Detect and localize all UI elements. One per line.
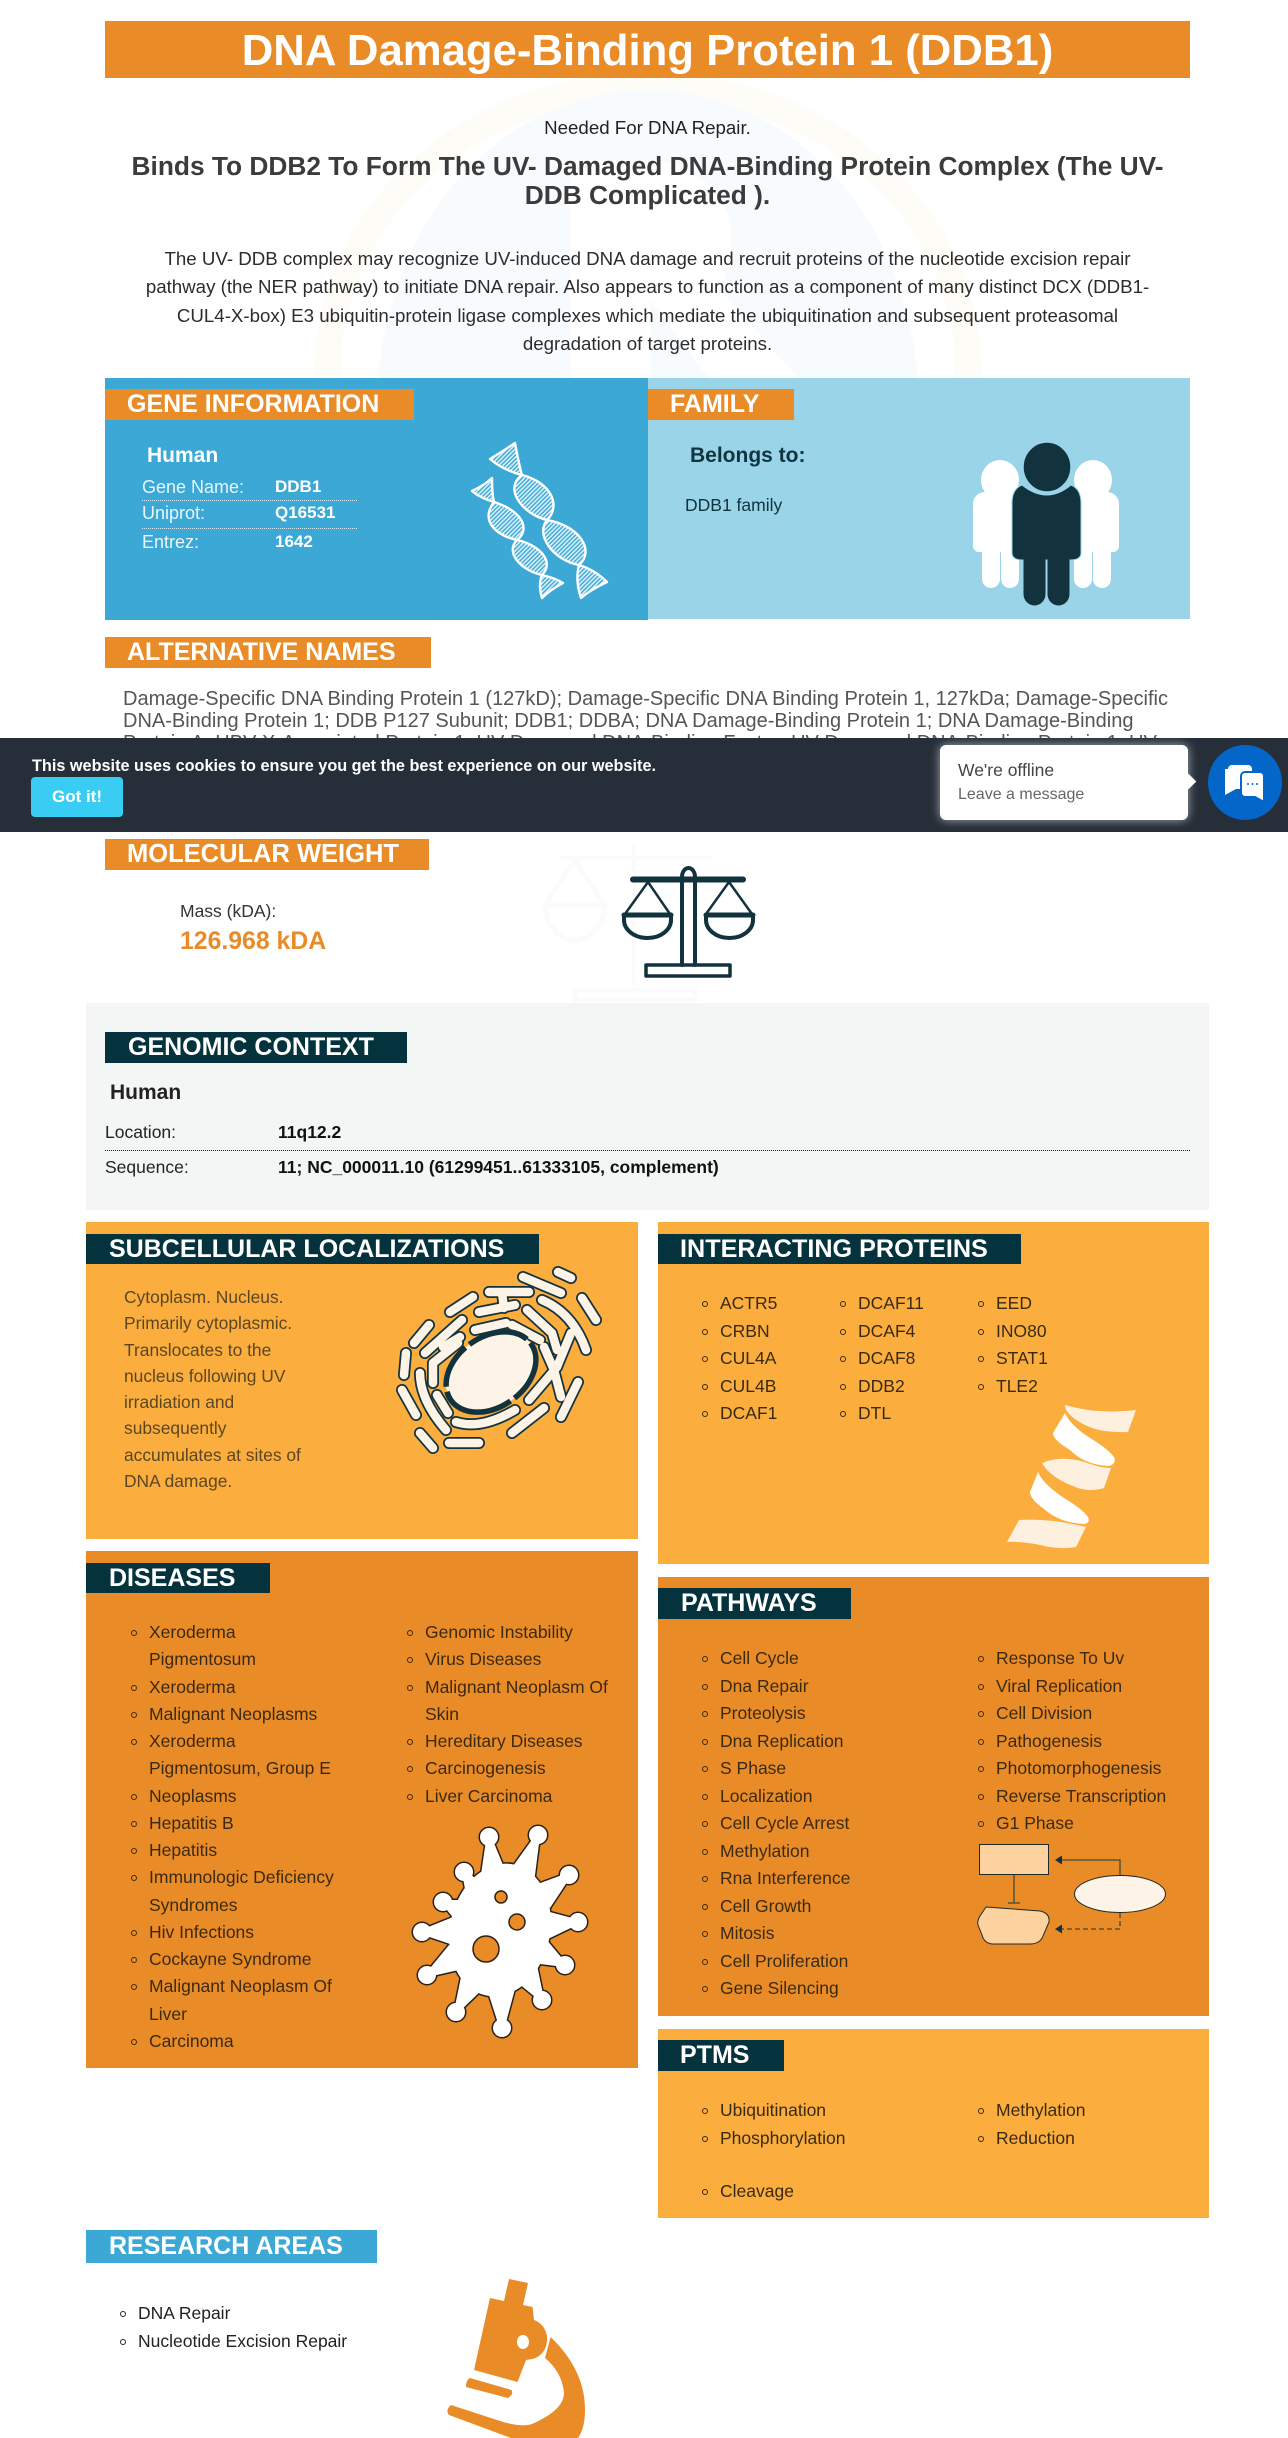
pathways list, second column: Response To Uv	[996, 1648, 1124, 1668]
function heading: DDB Complicated ).	[525, 180, 770, 210]
heading: genomic context: GENOMIC CONTEXT	[128, 1033, 374, 1061]
location row: Location:	[105, 1122, 176, 1142]
pathways list, second column: Viral Replication	[996, 1676, 1122, 1696]
PTMs list, second column: Methylation	[996, 2100, 1086, 2120]
proteins list, second column: DTL	[858, 1403, 891, 1423]
PTMs list, first column: Ubiquitination	[720, 2100, 826, 2120]
cookie message: This website uses cookies to ensure you get the best experience on our website.	[32, 757, 656, 775]
heading: diseases	[86, 1563, 270, 1593]
proteins list, first column: CRBN	[720, 1320, 770, 1340]
pathways list, second column	[978, 1648, 1166, 1833]
title banner	[105, 21, 1190, 78]
heading: pathways	[658, 1588, 851, 1619]
proteins list, second column	[840, 1293, 924, 1423]
gene info table: DDB1	[275, 477, 321, 496]
pathways list, first column: Dna Repair	[720, 1676, 809, 1696]
alternative names text: Damage-Specific DNA Binding Protein 1 (127kD); Damage-Specific DNA Binding Protein 1, 127kDa; Damage-Specific	[123, 688, 1168, 710]
localization description: accumulates at sites of	[124, 1445, 301, 1465]
chat offline bubble: Leave a message	[958, 786, 1084, 803]
heading: gene information: GENE INFORMATION	[127, 390, 379, 418]
diseases list, first column	[131, 1622, 334, 2051]
location row: 11q12.2	[278, 1122, 341, 1142]
proteins list, first column: DCAF1	[720, 1403, 777, 1423]
gene info table: Gene Name:	[142, 477, 244, 497]
description paragraph: CUL4-X-box) E3 ubiquitin-protein ligase complexes which mediate the ubiquitination and subsequent proteasomal	[177, 305, 1118, 326]
heading: family: FAMILY	[670, 390, 759, 418]
diseases list, second column: Carcinogenesis	[425, 1758, 546, 1778]
species label: Human	[147, 444, 218, 467]
panel: genomic context	[86, 1003, 1209, 1210]
pathways list, first column: Proteolysis	[720, 1703, 806, 1723]
diseases list, second column: Malignant Neoplasm Of	[425, 1676, 608, 1696]
heading: pathways: PATHWAYS	[681, 1589, 817, 1617]
diseases list, first column: Liver	[149, 2004, 187, 2024]
pathways list, first column: S Phase	[720, 1758, 786, 1778]
diseases list, first column: Syndromes	[149, 1894, 238, 1914]
diseases list, second column	[407, 1622, 608, 1806]
panel: gene information	[105, 378, 648, 620]
diseases list, first column: Carcinoma	[149, 2031, 234, 2051]
diseases list, second column: Virus Diseases	[425, 1649, 541, 1669]
proteins list, third column: EED	[996, 1293, 1032, 1313]
location row	[105, 1122, 341, 1142]
panel: family	[648, 378, 1190, 619]
species label: Human	[110, 1081, 181, 1104]
proteins list, second column: DDB2	[858, 1376, 905, 1396]
diseases list, first column: Pigmentosum, Group E	[149, 1758, 331, 1778]
icon: chat button	[1208, 745, 1282, 820]
proteins list, second column: DCAF4	[858, 1320, 915, 1340]
icon: group of people	[973, 442, 1119, 606]
localization description: subsequently	[124, 1418, 226, 1438]
proteins list, third column: INO80	[996, 1320, 1047, 1340]
function heading	[132, 150, 1163, 210]
pathways list, second column: Pathogenesis	[996, 1730, 1102, 1750]
pathways list, first column: Cell Proliferation	[720, 1950, 848, 1970]
diseases list, first column: Xeroderma	[149, 1676, 236, 1696]
gene info table: 1642	[275, 532, 313, 551]
diseases list, first column: Xeroderma	[149, 1622, 236, 1642]
mass label: Mass (kDA):	[180, 901, 276, 921]
diseases list, second column: Skin	[425, 1704, 459, 1724]
localization description: DNA damage.	[124, 1471, 232, 1491]
diseases list, first column: Pigmentosum	[149, 1649, 256, 1669]
gene info table: Uniprot:	[142, 503, 205, 523]
icon: microscope	[447, 2279, 585, 2438]
heading: research areas	[86, 2230, 377, 2263]
panel: PTMs	[658, 2029, 1209, 2218]
diseases list, second column: Liver Carcinoma	[425, 1786, 552, 1806]
diseases list, first column: Hepatitis B	[149, 1813, 234, 1833]
alternative names text: DNA-Binding Protein 1; DDB P127 Subunit; DDB1; DDBA; DNA Damage-Binding Protein 1; DNA Damage-Binding	[123, 710, 1134, 732]
pathways list, second column: Cell Division	[996, 1703, 1092, 1723]
icon: protein ribbon helix	[1007, 1405, 1136, 1548]
pathways list, second column: Photomorphogenesis	[996, 1758, 1161, 1778]
research areas list	[120, 2303, 347, 2350]
localization description: nucleus following UV	[124, 1366, 285, 1386]
title banner: DNA Damage-Binding Protein 1 (DDB1)	[242, 26, 1053, 75]
localization description	[124, 1287, 301, 1491]
pathways list, first column: Cell Cycle Arrest	[720, 1813, 849, 1833]
research areas list: Nucleotide Excision Repair	[138, 2330, 347, 2350]
localization description: Translocates to the	[124, 1340, 271, 1360]
heading: subcellular localizations: SUBCELLULAR LOCALIZATIONS	[109, 1235, 504, 1263]
panel: interacting proteins	[658, 1222, 1209, 1564]
pathways list, second column: G1 Phase	[996, 1813, 1074, 1833]
proteins list, third column: STAT1	[996, 1348, 1048, 1368]
background watermark logo	[315, 78, 981, 378]
mass value: 126.968 kDA	[180, 928, 326, 955]
pathways list, first column: Gene Silencing	[720, 1978, 839, 1998]
localization description: Primarily cytoplasmic.	[124, 1313, 292, 1333]
diseases list, first column: Malignant Neoplasm Of	[149, 1976, 332, 1996]
heading: research areas: RESEARCH AREAS	[109, 2232, 343, 2260]
chat offline bubble	[940, 745, 1188, 820]
heading: interacting proteins: INTERACTING PROTEINS	[680, 1235, 988, 1263]
icon: pathway diagram	[977, 1844, 1166, 1944]
button: got it	[31, 777, 123, 817]
icon: DNA double helix	[470, 442, 608, 600]
diseases list, second column: Hereditary Diseases	[425, 1731, 583, 1751]
belongs to label: Belongs to:	[690, 444, 806, 467]
pathways list, first column: Dna Replication	[720, 1730, 844, 1750]
cookie consent banner	[0, 738, 1288, 832]
PTMs list, first column: Cleavage	[720, 2180, 794, 2200]
family name: DDB1 family	[685, 495, 782, 515]
icon: virus	[412, 1824, 588, 2038]
panel: diseases	[86, 1551, 638, 2068]
diseases list, first column: Neoplasms	[149, 1786, 237, 1806]
proteins list, first column: CUL4B	[720, 1376, 776, 1396]
PTMs list, first column	[702, 2100, 846, 2200]
research areas list: DNA Repair	[138, 2303, 230, 2323]
subtitle: needed for DNA repair: Needed For DNA Repair.	[544, 117, 751, 138]
proteins list, second column: DCAF8	[858, 1348, 915, 1368]
heading: PTMs	[658, 2040, 784, 2071]
pathways list, first column: Localization	[720, 1786, 812, 1806]
heading: alternative names: ALTERNATIVE NAMES	[127, 638, 396, 666]
chat offline bubble: We're offline	[958, 760, 1054, 780]
panel: subcellular localizations	[86, 1222, 638, 1539]
PTMs list, second column: Reduction	[996, 2128, 1075, 2148]
diseases list, first column: Hiv Infections	[149, 1922, 254, 1942]
proteins list, third column	[978, 1293, 1048, 1396]
gene info table: Q16531	[275, 503, 336, 522]
pathways list, first column: Methylation	[720, 1840, 810, 1860]
diseases list, first column: Immunologic Deficiency	[149, 1867, 334, 1887]
description paragraph: The UV- DDB complex may recognize UV-induced DNA damage and recruit proteins of the nucleotide excision repair	[164, 248, 1130, 269]
icon: ghost scale watermark	[530, 840, 730, 1005]
button: got it: Got it!	[52, 787, 102, 806]
heading: PTMs: PTMS	[680, 2041, 749, 2069]
heading: diseases: DISEASES	[109, 1564, 235, 1592]
sequence row: Sequence:	[105, 1157, 189, 1177]
gene info table	[142, 477, 357, 552]
alternative names text: Protein A; HBV X-Associated Protein 1; UV-Damaged DNA-Binding Factor; UV-Damaged DNA-Binding Protein 1; UV-	[123, 732, 1162, 754]
pathways list, first column: Cell Cycle	[720, 1648, 799, 1668]
proteins list, first column	[702, 1293, 777, 1423]
pathways list, second column: Reverse Transcription	[996, 1786, 1166, 1806]
description paragraph	[146, 248, 1149, 354]
diseases list, first column: Malignant Neoplasms	[149, 1704, 317, 1724]
pathways list, first column: Rna Interference	[720, 1868, 850, 1888]
PTMs list, first column: Phosphorylation	[720, 2128, 846, 2148]
diseases list, first column: Hepatitis	[149, 1840, 217, 1860]
diseases list, first column: Xeroderma	[149, 1731, 236, 1751]
localization description: irradiation and	[124, 1392, 234, 1412]
pathways list, first column	[702, 1648, 850, 1998]
pathways list, first column: Mitosis	[720, 1923, 774, 1943]
proteins list, third column: TLE2	[996, 1376, 1038, 1396]
localization description: Cytoplasm. Nucleus.	[124, 1287, 283, 1307]
diseases list, first column: Cockayne Syndrome	[149, 1949, 311, 1969]
panel: pathways	[658, 1577, 1209, 2016]
description paragraph: pathway (the NER pathway) to initiate DNA repair. Also appears to function as a component of many distinct DCX (DDB1-	[146, 276, 1149, 297]
proteins list, first column: CUL4A	[720, 1348, 776, 1368]
pathways list, first column: Cell Growth	[720, 1896, 811, 1916]
icon: endoplasmic reticulum and nucleus	[396, 1266, 602, 1454]
alternative names text	[123, 688, 1168, 754]
heading: molecular weight: MOLECULAR WEIGHT	[127, 840, 399, 868]
description paragraph: degradation of target proteins.	[523, 333, 772, 354]
function heading: Binds To DDB2 To Form The UV- Damaged DNA-Binding Protein Complex (The UV-	[132, 150, 1163, 180]
gene info table: Entrez:	[142, 532, 199, 552]
diseases list, second column: Genomic Instability	[425, 1622, 573, 1642]
PTMs list, second column	[978, 2100, 1086, 2148]
proteins list, second column: DCAF11	[858, 1293, 924, 1313]
sequence row: 11; NC_000011.10 (61299451..61333105, complement)	[278, 1157, 719, 1177]
icon: balance scale	[622, 866, 756, 978]
heading: family	[648, 389, 794, 420]
proteins list, first column: ACTR5	[720, 1293, 777, 1313]
